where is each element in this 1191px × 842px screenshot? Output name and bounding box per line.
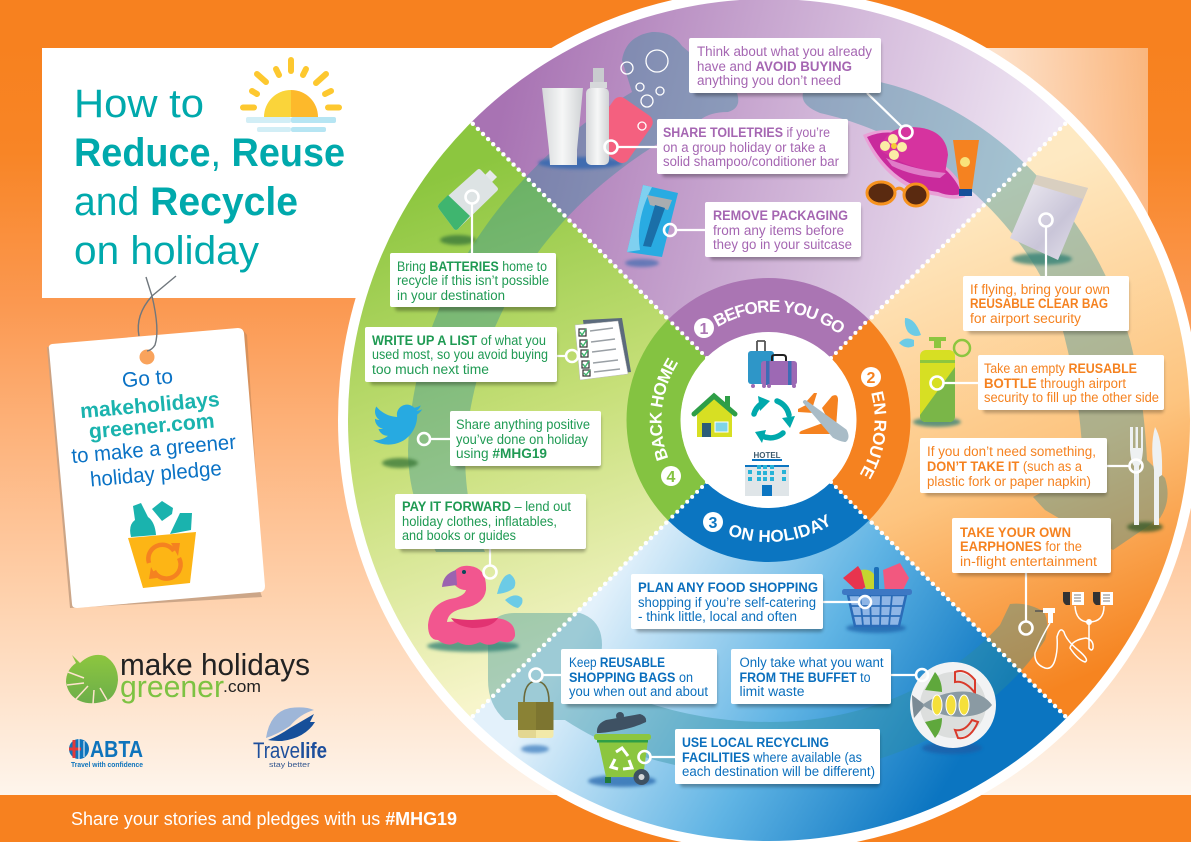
icon: reusable bag [518,681,554,753]
callout: share positive: Share anything positive [456,417,590,432]
title panel background [42,48,602,298]
icon: flamingo inflatable [427,566,522,652]
main wheel [338,0,1191,842]
callout: remove packaging: they go in your suitcase [713,237,852,252]
hub centre [680,332,856,508]
segment: 1 before you go: 1 [700,321,709,338]
callout: recycling facilities: USE LOCAL RECYCLING [682,735,829,750]
tag text: makeholidays [79,388,221,423]
segment: 4 back home [626,320,706,520]
bubbles [621,50,668,130]
segment: 3 on holiday: 3 [709,515,718,532]
callout: remove packaging [664,202,861,260]
icon: toiletries [538,50,668,169]
callout: don't take it: If you don’t need something, [927,444,1096,459]
callout: earphones: in-flight entertainment [960,554,1097,569]
tag text [64,360,239,493]
footer bar [0,795,1191,842]
callout: reusable shopping bags: Keep REUSABLE [569,655,665,670]
icon: suitcases [748,341,797,388]
tag hole and string [138,276,176,364]
icon: airplane [798,393,846,440]
segment: 1 before you go: BEFORE YOU GO [713,300,844,332]
callout: write up a list: used most, so you avoid buying [372,347,548,362]
wedge: back home [348,122,769,718]
callout: reusable shopping bags: SHOPPING BAGS on [569,670,693,685]
callout: plan food shopping [631,574,871,632]
callout: don't take it: plastic fork or paper napkin) [927,474,1091,489]
callout: share toiletries [604,119,848,177]
segment: 3 on holiday: ON HOLIDAY [729,514,828,542]
icon: house [694,396,735,437]
title: on holiday [74,229,259,273]
callout: clear bag [963,214,1129,334]
callout: reusable bottle [930,355,1164,413]
icon: sunglasses [867,182,928,206]
icon: checklist [575,318,631,380]
callout: from the buffet: FROM THE BUFFET to [740,670,870,685]
title [74,82,345,273]
callout: share positive: using #MHG19 [456,446,547,461]
segment: 3 on holiday [668,483,869,562]
callout: clear bag: If flying, bring your own [970,282,1110,297]
callout: recycling facilities: FACILITIES where available (as [682,750,862,765]
logo: ABTA: ABTA [90,736,143,762]
icon: battery [438,169,498,245]
tag text: greener.com [88,410,215,443]
callout: reusable shopping bags: you when out and about [569,684,708,699]
callout: share positive: you’ve done on holiday [456,432,588,447]
icon: spray bottle [586,68,609,165]
icon: earphones [1035,592,1113,668]
footer text: Share your stories and pledges with us #MHG19 [71,809,457,829]
icon: clear bag [1010,175,1088,265]
callout: pay it forward: and books or guides [402,528,516,543]
callout: avoid buying: anything you don’t need [697,73,841,88]
callout: don't take it: DON’T TAKE IT (such as a [927,459,1082,474]
callout: share positive [418,411,601,469]
icon: shopping basket [842,563,912,633]
dotted wedge dividers [471,122,1067,718]
segment: 1 before you go [668,278,869,357]
logo: ABTA [69,736,143,769]
wedge: en route [769,122,1190,718]
icon: razor packet [625,185,678,267]
title: Reduce, Reuse [74,131,345,175]
icon: hotel: HOTEL [754,450,780,460]
segment: 2 en route: EN ROUTE [860,391,886,480]
logo: make holidays greener [66,647,310,704]
icon: hotel [745,450,789,496]
icon: sun over water [243,60,339,132]
callout: clear bag: for airport security [970,311,1081,326]
callout: avoid buying: Think about what you already [697,44,872,59]
segment: 2 en route: 2 [867,370,876,387]
callout: batteries: in your destination [397,288,505,303]
callout: plan food shopping: shopping if you’re self-catering [638,595,816,610]
callout: avoid buying [689,38,912,138]
logo: make holidays greener: .com [223,677,261,696]
icon: hat, sunglasses and sun cream [863,127,979,206]
callout: reusable shopping bags [530,649,717,707]
title: How to [74,82,204,126]
wedge: before you go [471,0,1067,420]
callout: from the buffet [731,649,928,707]
callout: earphones [952,518,1111,634]
logo: Travelife: stay better [269,762,311,769]
callout: share toiletries: on a group holiday or take a [663,140,826,155]
tag text: to make a greener [71,431,237,468]
callout: batteries: recycle if this isn’t possible [397,273,549,288]
icon: recycling bin [588,712,656,787]
icon: monstera leaf [66,655,118,704]
logo: make holidays greener: make holidays [120,647,310,682]
icon: twitter bird [373,405,422,468]
callout: recycling facilities [638,729,880,787]
callout: batteries [390,190,556,311]
logo: ABTA: Travel with confidence [71,762,143,769]
callout: from the buffet: Only take what you want [740,655,884,670]
wedge: on holiday [471,420,1067,841]
tag text: Go to [121,365,174,392]
icon: reusable bottle [899,318,970,427]
icon: plastic fork and knife [1127,427,1163,532]
icon: tube [542,88,583,165]
hub: stage ring [626,278,910,562]
logo: make holidays greener: greener [120,669,224,704]
callout: write up a list: WRITE UP A LIST of what you [372,333,546,348]
callout: plan food shopping: - think little, local and often [638,609,797,624]
callout: reusable bottle: BOTTLE through airport [984,376,1126,391]
recycling swoosh bands [408,32,1168,775]
callout: earphones: TAKE YOUR OWN [960,525,1071,540]
tag text: holiday pledge [89,457,223,492]
callout: recycling facilities: each destination will be different) [682,764,875,779]
callout: plan food shopping: PLAN ANY FOOD SHOPPING [638,580,818,595]
callout: share toiletries: SHARE TOILETRIES if you’re [663,125,830,140]
callout: don't take it [920,438,1142,496]
callout: reusable bottle: security to fill up the other side [984,390,1159,405]
callout: from the buffet: limit waste [740,684,804,699]
icon: hand and leaf [266,707,315,741]
callout: remove packaging: from any items before [713,223,844,238]
logo: Travelife [253,707,327,769]
pledge tag [47,276,265,608]
icon: sun cream [953,140,979,196]
callout: pay it forward: PAY IT FORWARD – lend out [402,499,571,514]
callout: pay it forward: holiday clothes, inflatables, [402,514,557,529]
callout: avoid buying: have and AVOID BUYING [697,59,852,74]
title: and Recycle [74,180,298,224]
callout: remove packaging: REMOVE PACKAGING [713,208,848,223]
callout: earphones: EARPHONES for the [960,539,1082,554]
callout: share toiletries: solid shampoo/conditioner bar [663,154,839,169]
icon: recycling bin with bottles [128,501,196,588]
icon: soap [586,94,656,166]
callout: batteries: Bring BATTERIES home to [397,259,547,274]
icon: globe flag [69,739,89,759]
logo: Travelife: Travelife [253,738,327,763]
callout: reusable bottle: Take an empty REUSABLE [984,361,1137,376]
callout: write up a list: too much next time [372,362,489,377]
segment: 4 back home: 4 [667,469,676,486]
callout: clear bag: REUSABLE CLEAR BAG [970,296,1108,311]
callout: pay it forward [395,494,586,578]
callout: write up a list [365,327,578,385]
segment: 2 en route [832,320,910,520]
icon: recycling arrows [754,396,795,443]
segment: 4 back home: BACK HOME [650,358,678,461]
icon: fish on plate [910,662,996,754]
